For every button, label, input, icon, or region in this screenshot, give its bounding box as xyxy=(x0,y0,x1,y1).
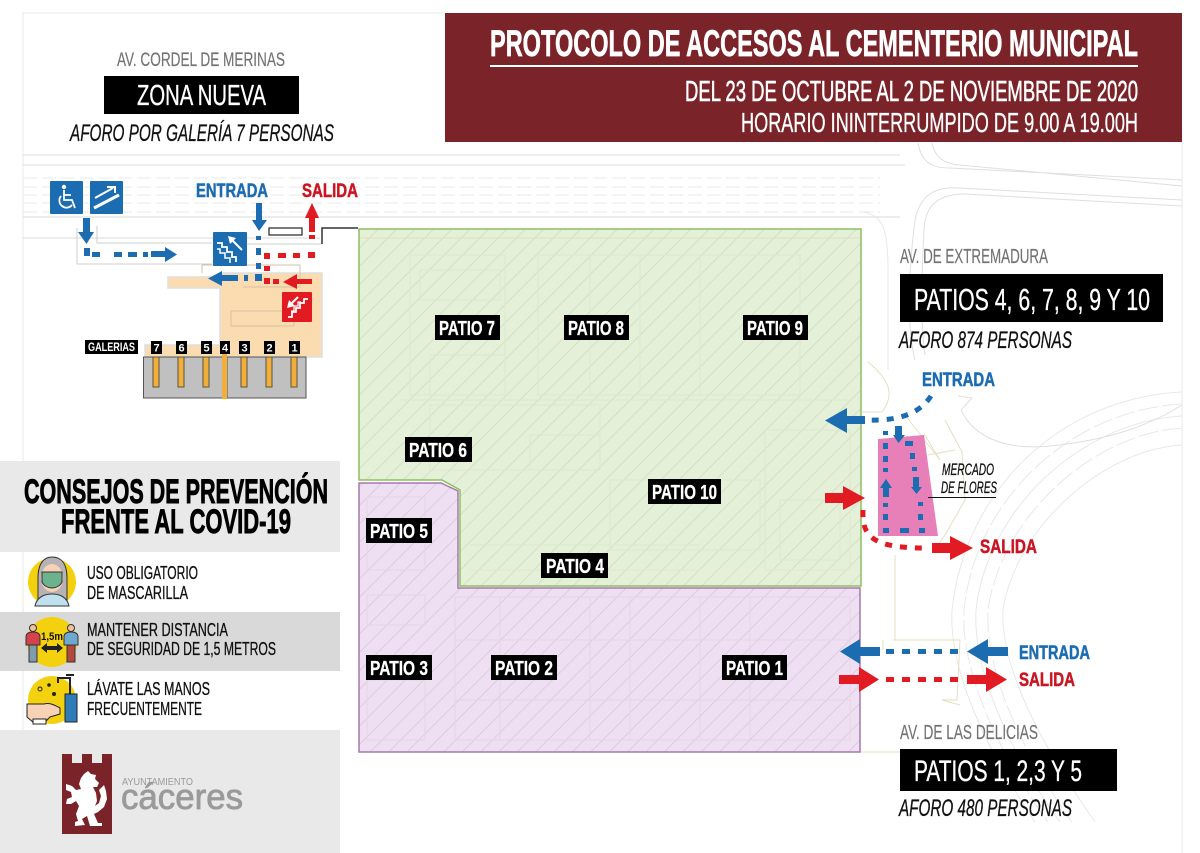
block: av de las delicias: PATIOS 1, 2,3 Y 5 xyxy=(914,755,1082,788)
block: av de las delicias xyxy=(898,722,1117,822)
icon: stairs down xyxy=(282,292,312,322)
map: purple zone xyxy=(359,483,860,752)
block: av de las delicias: AV. DE LAS DELICIAS xyxy=(900,722,1038,744)
entrada route: extremadura: ENTRADA xyxy=(922,370,995,391)
salida route: delicias xyxy=(839,667,1075,692)
tip: hand washing: FRECUENTEMENTE xyxy=(87,699,202,719)
tip: mask: USO OBLIGATORIO xyxy=(87,563,198,583)
gallery labels xyxy=(85,340,300,354)
tip: hand washing: LÁVATE LAS MANOS xyxy=(87,679,210,699)
block: zona nueva: AV. CORDEL DE MERINAS xyxy=(117,50,285,71)
icon: distance xyxy=(26,617,78,667)
block: av de extremadura: AFORO 874 PERSONAS xyxy=(898,327,1072,354)
gallery labels: GALERIAS xyxy=(88,342,135,354)
block: zona nueva: ZONA NUEVA xyxy=(137,80,266,112)
gallery labels: 7 xyxy=(154,342,160,354)
gallery labels: 5 xyxy=(204,342,210,354)
patio labels: PATIO 7 xyxy=(439,318,495,340)
patio labels: PATIO 4 xyxy=(546,556,605,578)
icon: mask xyxy=(28,557,76,606)
gallery labels: 4 xyxy=(222,342,229,354)
gallery labels: 1 xyxy=(292,342,298,354)
entrada route: delicias: ENTRADA xyxy=(1019,643,1090,664)
block: zona nueva: AFORO POR GALERÍA 7 PERSONAS xyxy=(69,120,334,147)
logo: ayuntamiento de caceres: AYUNTAMIENTO xyxy=(122,776,193,788)
block: av de las delicias: AFORO 480 PERSONAS xyxy=(898,795,1072,822)
panel: covid prevention xyxy=(0,461,340,853)
tip: mask: DE MASCARILLA xyxy=(87,583,188,603)
entrada route: extremadura xyxy=(825,370,995,533)
salida route: extremadura: SALIDA xyxy=(980,537,1037,558)
patio labels: PATIO 6 xyxy=(409,440,467,462)
icon: distance: 1,5m xyxy=(41,631,63,643)
patio labels: PATIO 3 xyxy=(370,658,428,680)
panel heading: CONSEJOS DE PREVENCIÓN xyxy=(24,473,328,511)
block: av de extremadura: AV. DE EXTREMADURA xyxy=(900,246,1048,268)
patio labels: PATIO 1 xyxy=(726,658,783,680)
salida route: delicias: SALIDA xyxy=(1019,670,1075,691)
panel heading: FRENTE AL COVID-19 xyxy=(61,503,291,541)
patio labels: PATIO 5 xyxy=(370,521,428,543)
title banner xyxy=(445,13,1182,142)
label: salida top: SALIDA xyxy=(302,181,358,202)
label: entrada top: ENTRADA xyxy=(196,181,268,202)
gallery labels: 2 xyxy=(266,342,273,354)
icon: ramp xyxy=(90,181,123,214)
patio labels: PATIO 8 xyxy=(568,318,624,340)
salida route: extremadura xyxy=(825,486,1037,560)
tip: distance: MANTENER DISTANCIA xyxy=(87,620,228,640)
gallery labels: 3 xyxy=(242,342,248,354)
market label: MERCADO xyxy=(942,461,994,479)
icon: hand washing xyxy=(27,675,77,724)
patio labels: PATIO 10 xyxy=(652,482,717,504)
logo: ayuntamiento de caceres xyxy=(62,754,243,834)
access plan: zona nueva xyxy=(50,181,358,399)
patio labels xyxy=(366,315,808,680)
map: green zone xyxy=(359,229,861,586)
entrada route: delicias xyxy=(840,639,1090,664)
icon: wheelchair xyxy=(50,181,83,214)
flower market xyxy=(878,435,997,536)
gallery blocks xyxy=(144,357,224,398)
flower market: DE FLORES xyxy=(941,479,997,497)
gallery labels: 6 xyxy=(178,342,185,354)
logo: ayuntamiento de caceres: cáceres xyxy=(121,776,243,817)
tip: distance: DE SEGURIDAD DE 1,5 METROS xyxy=(87,639,276,659)
block: av de extremadura xyxy=(898,246,1163,354)
patio labels: PATIO 2 xyxy=(495,658,553,680)
blue route arrows xyxy=(78,203,267,286)
patio labels: PATIO 9 xyxy=(747,318,803,340)
red route arrows xyxy=(264,203,319,289)
icon: stairs up xyxy=(213,232,247,266)
block: zona nueva xyxy=(69,50,334,147)
orange entrance area xyxy=(145,273,322,357)
